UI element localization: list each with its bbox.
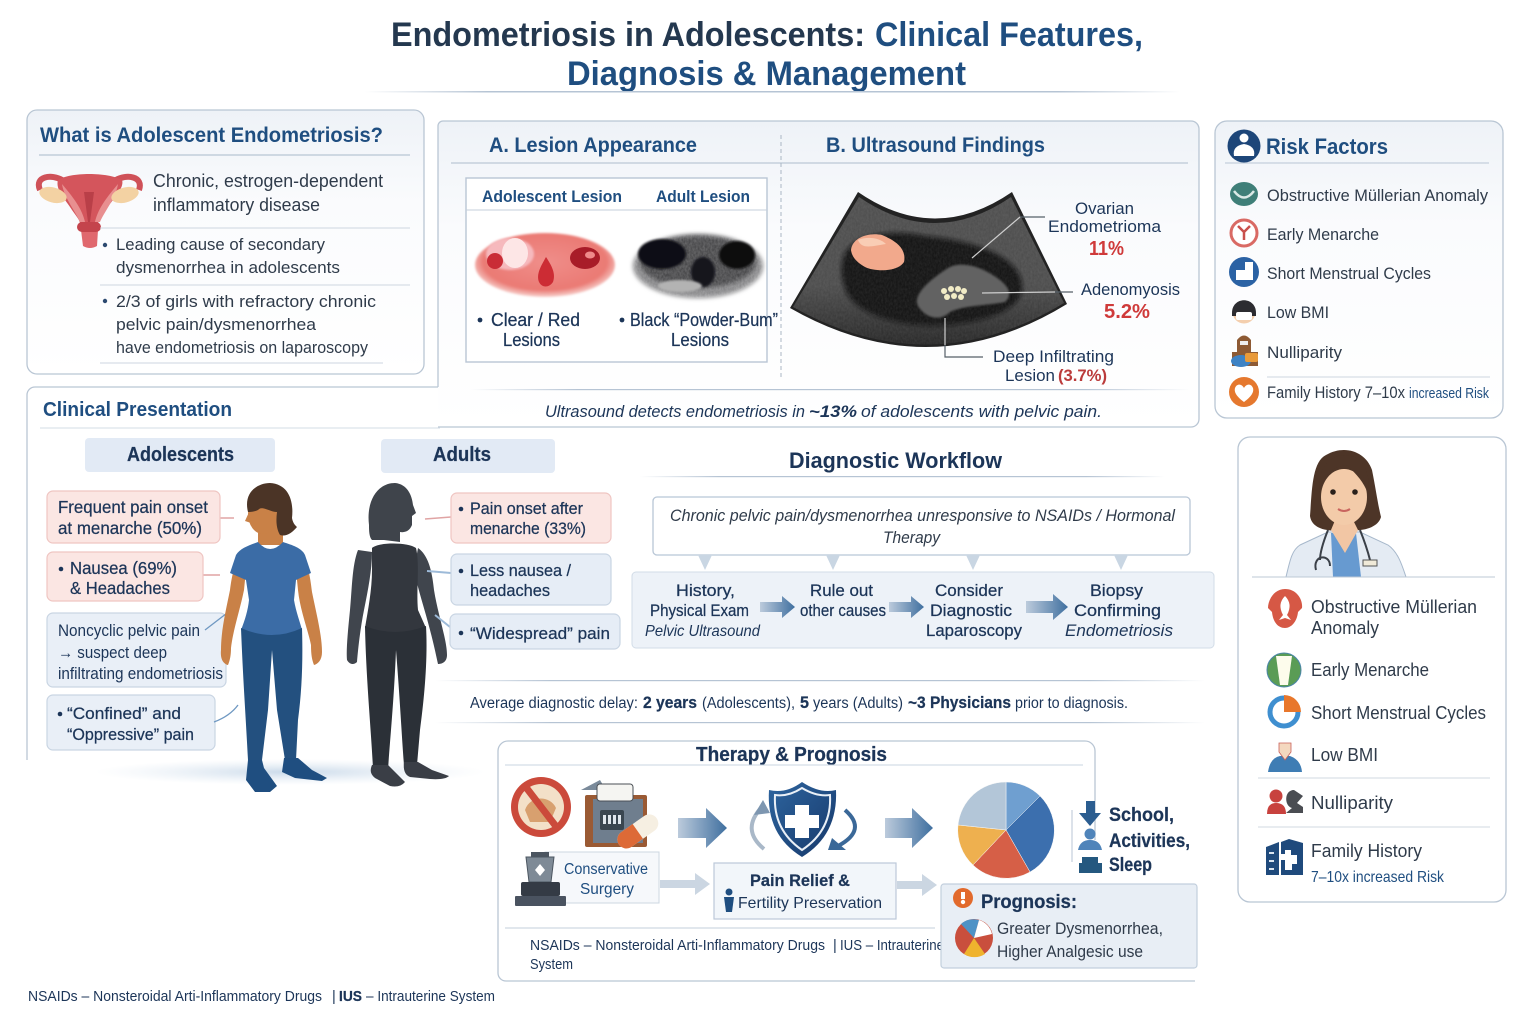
list: nulliparity: Nulliparity: [1311, 793, 1393, 813]
box: widespread pain: “Widespread” pain: [470, 624, 610, 643]
pill: adolescents: Adolescents: [127, 444, 234, 466]
text: diagnostic delay: ~3 Physicians: [908, 693, 1011, 712]
box: noncyclic pelvic pain: → suspect deep: [58, 644, 167, 662]
icon: pillow: [1079, 857, 1102, 873]
box: pain relief and fertility preservation: Fertility Preservation: [738, 895, 882, 912]
box: chronic pelvic pain: [653, 497, 1190, 555]
box: pain relief and fertility preservation: [714, 863, 896, 919]
arrow: [760, 596, 795, 618]
box: prognosis: [941, 884, 1197, 968]
step: biopsy: Confirming: [1074, 601, 1161, 620]
risk: obstructive mullerian anomaly: [1230, 182, 1488, 206]
title: Endometriosis in Adolescents:: [391, 16, 865, 54]
risk: short menstrual cycles: Short Menstrual Cycles: [1267, 264, 1431, 283]
image: black lesion: [633, 234, 763, 298]
text: school activities sleep: [1109, 804, 1190, 876]
footer: abbreviations: NSAIDs – Nonsteroidal Arti-Inflammatory Drugs: [28, 989, 322, 1005]
box: confined and oppressive: “Oppressive” pain: [67, 725, 194, 744]
arrow: [660, 873, 710, 895]
icon: person: [1078, 828, 1102, 850]
panel: lesion and ultrasound: [438, 121, 1199, 427]
list: obstructive mullerian anomaly: [1268, 589, 1477, 638]
risk: nulliparity: [1231, 336, 1342, 367]
label: black lesions: Black “Powder-Bum”: [630, 310, 778, 330]
lesion comparison box: Adolescent Lesion: [482, 187, 622, 206]
box: conservative surgery: Surgery: [580, 881, 634, 898]
step: rule out: other causes: [800, 602, 886, 620]
icon: shield with cross: [752, 782, 855, 857]
list: early menarche: Early Menarche: [1311, 660, 1429, 680]
panel: risk factors: [1215, 121, 1503, 418]
text: diagnostic delay: (Adolescents),: [702, 695, 795, 712]
step: history: Physical Exam: [650, 602, 749, 620]
icon: mini pie: [955, 919, 993, 957]
callout: adenomyosis: Adenomyosis: [1081, 280, 1180, 299]
text: abbreviations: [530, 938, 944, 973]
box: confined and oppressive: [47, 695, 238, 750]
risk: nulliparity: Nulliparity: [1267, 343, 1342, 362]
label: black lesions: Lesions: [671, 330, 729, 350]
box: chronic pelvic pain: Chronic pelvic pain/dysmenorrhea unresponsive to NSAIDs / Hormonal: [670, 507, 1176, 525]
footer: abbreviations: – Intrauterine System: [366, 989, 495, 1005]
box: less nausea: headaches: [470, 581, 550, 600]
bullet: two thirds: [103, 292, 377, 357]
risk: early menarche: [1231, 220, 1379, 246]
callout: adenomyosis: [982, 280, 1180, 323]
risk: family history: Family History 7–10x: [1267, 383, 1405, 402]
icon: uterus: [38, 174, 140, 248]
text: diagnostic delay: 2 years: [643, 693, 697, 712]
heading: diagnostic workflow: Diagnostic Workflow: [789, 448, 1003, 473]
text: ultrasound detects: [545, 402, 1102, 421]
text: ultrasound detects: ~13%: [809, 402, 857, 421]
text: school activities sleep: Sleep: [1109, 854, 1152, 876]
arrow: [885, 808, 933, 848]
pill: adolescents: [85, 438, 275, 472]
box: prognosis: Prognosis:: [981, 892, 1077, 913]
icon: no NSAID sign: [511, 777, 571, 837]
text: diagnostic delay: years (Adults): [813, 695, 903, 712]
box: frequent pain onset: at menarche (50%): [58, 518, 202, 538]
step: laparoscopy: Diagnostic: [930, 601, 1013, 620]
label: black lesions: [620, 310, 778, 350]
title: Diagnosis & Management: [567, 55, 966, 93]
text: diagnostic delay: Average diagnostic delay:: [470, 695, 638, 712]
list: low BMI: Low BMI: [1311, 745, 1378, 765]
panel: doctor and risk list: [1238, 437, 1506, 902]
figure: adolescent: [221, 483, 327, 792]
lesion comparison box: [466, 178, 778, 362]
icon: risk header: [1228, 130, 1260, 162]
icon: alert: [953, 888, 973, 908]
arrow: [678, 808, 727, 848]
text: definition: [153, 171, 383, 215]
risk: obstructive mullerian anomaly: Obstructive Müllerian Anomaly: [1267, 186, 1488, 205]
heading: therapy and prognosis: Therapy & Prognosis: [696, 744, 887, 766]
list: short menstrual cycles: [1270, 695, 1486, 726]
list: short menstrual cycles: Short Menstrual Cycles: [1311, 703, 1486, 723]
heading: what is: What is Adolescent Endometriosis?: [40, 124, 383, 147]
panel: therapy and prognosis: [498, 741, 1197, 981]
step: laparoscopy: Laparoscopy: [926, 621, 1022, 640]
pill: adults: [381, 439, 555, 473]
box: pain relief and fertility preservation: Pain Relief &: [750, 871, 850, 890]
risk: low BMI: Low BMI: [1267, 303, 1329, 322]
step: history: [645, 582, 761, 640]
text: definition: Chronic, estrogen-dependent: [153, 171, 383, 191]
text: abbreviations: |: [833, 938, 837, 954]
lesion comparison box: Adult Lesion: [656, 187, 750, 206]
box: pain onset after menarche: [425, 493, 611, 543]
box: nausea: Nausea (69%): [70, 558, 177, 578]
list: nulliparity: [1267, 790, 1393, 814]
bullet: two thirds: pelvic pain/dysmenorrhea: [116, 315, 317, 334]
box: nausea: [47, 552, 220, 601]
risk: family history: increased Risk: [1409, 385, 1489, 402]
step: rule out: Rule out: [810, 582, 873, 600]
box: nausea: & Headaches: [70, 578, 170, 598]
list: early menarche: [1267, 653, 1429, 687]
figure: doctor: [1286, 450, 1406, 577]
arrow: [897, 874, 937, 896]
text: school activities sleep: School,: [1109, 804, 1174, 826]
label: clear red lesions: Lesions: [503, 330, 560, 350]
title: [391, 16, 1143, 93]
panel: clinical presentation: [27, 387, 620, 792]
box: conservative surgery: Conservative: [564, 861, 648, 878]
box: conservative surgery: [545, 852, 659, 903]
step: rule out: [800, 582, 886, 620]
box: widespread pain: [435, 614, 620, 649]
step: history: History,: [676, 582, 735, 600]
label: clear red lesions: [478, 310, 580, 350]
list: low BMI: [1268, 743, 1378, 772]
image: red lesion: [475, 233, 615, 297]
footer: abbreviations: IUS: [339, 989, 362, 1005]
ultrasound image: [790, 192, 1067, 347]
callout: ovarian endometrioma: [972, 199, 1162, 260]
box: less nausea: Less nausea /: [470, 561, 571, 580]
list: family history: [1266, 839, 1445, 886]
step: history: Pelvic Ultrasound: [645, 623, 761, 640]
figure: adult silhouette: [347, 483, 449, 786]
footer: abbreviations: [28, 989, 495, 1005]
box: chronic pelvic pain: Therapy: [883, 529, 942, 547]
text: ultrasound detects: of adolescents with pelvic pain.: [861, 402, 1102, 421]
arrow: [889, 596, 924, 618]
footer: abbreviations: |: [332, 989, 336, 1005]
box: confined and oppressive: “Confined” and: [67, 704, 181, 723]
bullet: leading cause: Leading cause of secondary: [116, 235, 325, 254]
heading: lesion appearance: A. Lesion Appearance: [489, 134, 697, 157]
risk: early menarche: Early Menarche: [1267, 225, 1379, 244]
box: prognosis: Higher Analgesic use: [997, 943, 1143, 961]
panel: diagnostic workflow: [632, 448, 1214, 648]
callout: deep infiltrating lesion: [945, 318, 1114, 385]
icon: surgery equipment: [515, 852, 566, 906]
step: biopsy: Biopsy: [1090, 581, 1144, 600]
text: diagnostic delay: prior to diagnosis.: [1015, 695, 1128, 712]
heading: risk factors: Risk Factors: [1266, 134, 1388, 159]
pill: adults: Adults: [433, 444, 491, 466]
panel: what is adolescent endometriosis: [27, 110, 424, 374]
list: family history: Family History: [1311, 841, 1422, 861]
risk: short menstrual cycles: [1229, 257, 1431, 287]
text: ultrasound detects: Ultrasound detects endometriosis in: [545, 402, 805, 421]
box: pain onset after menarche: Pain onset after: [470, 499, 583, 518]
heading: clinical presentation: Clinical Presentation: [43, 399, 232, 421]
step: biopsy: Endometriosis: [1065, 621, 1173, 640]
box: less nausea: [427, 554, 611, 605]
text: abbreviations: NSAIDs – Nonsteroidal Arti-Inflammatory Drugs: [530, 938, 825, 954]
text: diagnostic delay: [470, 693, 1128, 712]
text: school activities sleep: Activities,: [1109, 830, 1190, 852]
heading: ultrasound findings: B. Ultrasound Findings: [826, 134, 1045, 157]
bullet: leading cause: [103, 235, 340, 277]
text: diagnostic delay: 5: [800, 693, 809, 712]
risk: low BMI: [1232, 300, 1329, 324]
bullet: two thirds: have endometriosis on laparoscopy: [116, 338, 368, 357]
text: definition: inflammatory disease: [153, 195, 320, 215]
callout: deep infiltrating lesion: (3.7%): [1058, 366, 1107, 385]
chart: outcome pie: [958, 782, 1054, 878]
box: frequent pain onset: Frequent pain onset: [58, 497, 208, 517]
callout: ovarian endometrioma: 11%: [1089, 238, 1124, 260]
text: abbreviations: IUS – Intrauterine: [840, 938, 944, 954]
workflow band: [632, 572, 1214, 648]
box: noncyclic pelvic pain: infiltrating endometriosis: [58, 665, 223, 683]
box: prognosis: Greater Dysmenorrhea,: [997, 920, 1163, 938]
bullet: two thirds: 2/3 of girls with refractory chronic: [116, 292, 377, 311]
step: laparoscopy: [926, 581, 1022, 640]
box: frequent pain onset: [47, 491, 234, 543]
title: Clinical Features,: [875, 16, 1143, 54]
step: biopsy: [1065, 581, 1173, 640]
arrow: [1026, 594, 1068, 620]
risk: family history: [1229, 377, 1489, 407]
box: noncyclic pelvic pain: [47, 610, 231, 687]
callout: ovarian endometrioma: Ovarian: [1075, 199, 1134, 218]
list: family history: 7–10x increased Risk: [1311, 869, 1445, 886]
step: laparoscopy: Consider: [935, 581, 1003, 600]
box: noncyclic pelvic pain: Noncyclic pelvic pain: [58, 622, 200, 640]
bullet: leading cause: dysmenorrhea in adolescents: [116, 258, 340, 277]
icon: clipboard and pill: [581, 780, 662, 852]
callout: deep infiltrating lesion: Deep Infiltrating: [993, 347, 1114, 366]
list: obstructive mullerian anomaly: Anomaly: [1311, 618, 1379, 638]
icon: down arrow: [1079, 801, 1101, 826]
list: obstructive mullerian anomaly: Obstructive Müllerian: [1311, 597, 1477, 617]
text: abbreviations: System: [530, 957, 573, 973]
callout: ovarian endometrioma: Endometrioma: [1048, 217, 1162, 236]
callout: deep infiltrating lesion: Lesion: [1005, 366, 1055, 385]
box: pain onset after menarche: menarche (33%): [470, 519, 586, 538]
label: clear red lesions: Clear / Red: [491, 310, 580, 330]
callout: adenomyosis: 5.2%: [1104, 301, 1150, 323]
